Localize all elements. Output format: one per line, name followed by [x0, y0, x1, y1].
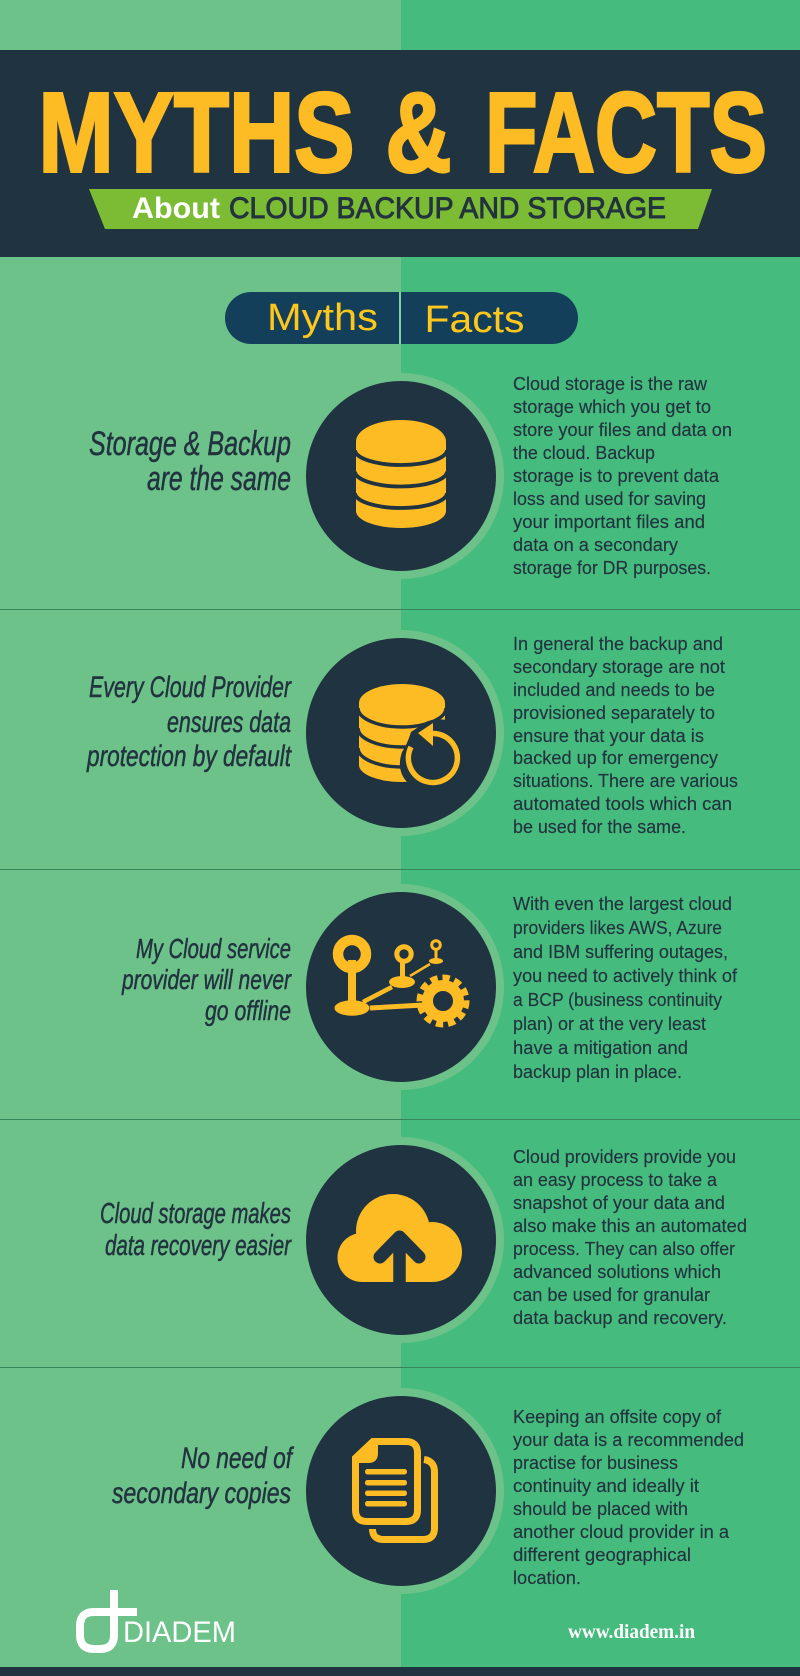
myth 5: secondary copies: [112, 1477, 291, 1510]
fact 2: included and needs to be: [513, 679, 715, 700]
fact 4: can be used for granular: [513, 1284, 710, 1305]
fact 5: practise for business: [513, 1452, 678, 1473]
fact 3: a BCP (business continuity: [513, 989, 723, 1010]
myth 4: Cloud storage makes: [100, 1198, 291, 1230]
panel: row 4: [100, 1137, 752, 1343]
fact 3: and IBM suffering outages,: [513, 941, 728, 962]
fact 1: your important files and: [513, 511, 705, 532]
fact 2: automated tools which can: [513, 793, 732, 814]
logo: Diadem: DIADEM: [123, 1616, 236, 1649]
myth 1: are the same: [147, 460, 291, 498]
icon: documents: [298, 1388, 504, 1594]
myth 1: Storage & Backup: [89, 425, 291, 463]
title: MYTHS: [38, 70, 354, 196]
fact 4: advanced solutions which: [513, 1261, 721, 1282]
panel: row 5: [112, 1388, 749, 1594]
column headers pill: [225, 292, 578, 344]
myth 2: ensures data: [167, 706, 291, 739]
myth 2: Every Cloud Provider: [89, 671, 292, 704]
fact 2: provisioned separately to: [513, 702, 715, 723]
fact 2: backed up for emergency: [513, 747, 719, 768]
title: &: [386, 70, 452, 196]
fact 1: loss and used for saving: [513, 488, 706, 509]
myth 4: data recovery easier: [105, 1230, 292, 1262]
fact 4: Cloud providers provide you: [513, 1146, 736, 1167]
footer bar: [0, 1667, 800, 1676]
fact 5: location.: [513, 1567, 581, 1588]
fact 4: data backup and recovery.: [513, 1307, 727, 1328]
subtitle banner: CLOUD BACKUP AND STORAGE: [229, 192, 666, 225]
fact 3: With even the largest cloud: [513, 893, 732, 914]
fact 4: also make this an automated: [513, 1215, 747, 1236]
fact 1: the cloud. Backup: [513, 442, 655, 463]
icon: cloud upload: [298, 1137, 504, 1343]
icon: network nodes and gear: [298, 884, 504, 1090]
subtitle banner: About: [132, 192, 220, 225]
panel: row 2: [86, 630, 743, 837]
fact 3: providers likes AWS, Azure: [513, 917, 722, 938]
myth 3: go offline: [205, 995, 291, 1026]
fact 3: plan) or at the very least: [513, 1013, 706, 1034]
fact 5: different geographical: [513, 1544, 691, 1565]
header band: [0, 50, 800, 257]
myth 5: No need of: [181, 1442, 294, 1475]
fact 5: another cloud provider in a: [513, 1521, 730, 1542]
fact 3: you need to actively think of: [513, 965, 738, 986]
fact 1: store your files and data on: [513, 419, 732, 440]
myth 3: My Cloud service: [136, 933, 291, 964]
fact 5: should be placed with: [513, 1498, 688, 1519]
fact 4: snapshot of your data and: [513, 1192, 725, 1213]
fact 2: secondary storage are not: [513, 656, 725, 677]
column headers pill: Myths: [267, 297, 378, 339]
fact 3: have a mitigation and: [513, 1037, 688, 1058]
fact 5: Keeping an offsite copy of: [513, 1406, 722, 1427]
panel: row 3: [121, 884, 742, 1090]
fact 2: ensure that your data is: [513, 725, 704, 746]
fact 2: In general the backup and: [513, 633, 723, 654]
myth 2: protection by default: [86, 740, 292, 773]
website url: www.diadem.in: [568, 1621, 695, 1643]
fact 1: storage which you get to: [513, 396, 711, 417]
myth 3: provider will never: [121, 964, 292, 995]
fact 4: an easy process to take a: [513, 1169, 718, 1190]
fact 1: storage is to prevent data: [513, 465, 720, 486]
fact 5: continuity and ideally it: [513, 1475, 699, 1496]
fact 2: situations. There are various: [513, 770, 738, 791]
subtitle banner: [89, 189, 712, 229]
panel: row 1: [89, 373, 737, 579]
fact 1: data on a secondary: [513, 534, 679, 555]
column headers pill: Facts: [424, 299, 524, 341]
fact 3: backup plan in place.: [513, 1061, 682, 1082]
fact 1: storage for DR purposes.: [513, 557, 711, 578]
icon: database restore: [298, 630, 504, 836]
fact 4: process. They can also offer: [513, 1238, 735, 1259]
icon: database: [298, 373, 504, 579]
logo: Diadem: [80, 1590, 236, 1649]
fact 1: Cloud storage is the raw: [513, 373, 708, 394]
fact 5: your data is a recommended: [513, 1429, 744, 1450]
fact 2: be used for the same.: [513, 816, 686, 837]
